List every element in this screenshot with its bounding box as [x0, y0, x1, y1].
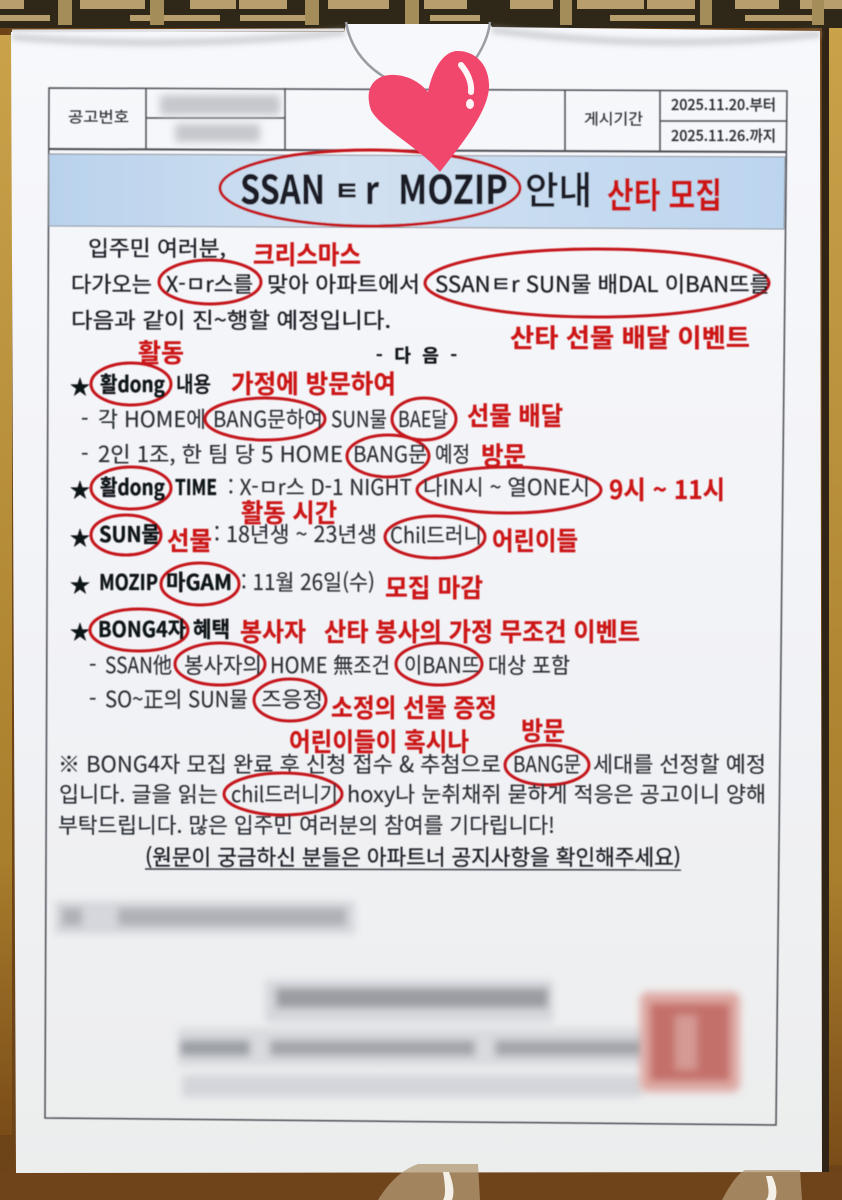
annotation: Christmas: 크리스마스 [253, 235, 361, 272]
header label: posting period: 게시기간 [584, 108, 643, 129]
detail line: teams of two: 2인 1조, 한 팀 당 5 HOME [98, 438, 343, 469]
section: activity time: 나IN시 ~ 열ONE시 [423, 471, 590, 502]
posting dates: 2025.11.20.부터 [671, 94, 776, 115]
footnote paragraph: chil드러니기 [231, 778, 338, 809]
section: recruitment deadline: : 11월 26일(수) [241, 566, 375, 597]
document frame and header table [45, 88, 787, 1125]
header label: notice number: 공고번호 [68, 106, 129, 127]
detail line: unconditional inclusion: HOME 無조건 [270, 649, 390, 680]
section: recruitment deadline: ★ [70, 569, 90, 598]
detail line: teams of two: - [81, 438, 88, 469]
annotation: activity time: 활동 시간 [241, 493, 337, 530]
heart sticker [369, 51, 489, 172]
detail line: visit each home: 각 HOME에 [98, 403, 206, 434]
detail line: small gift [89, 679, 497, 725]
footnote paragraph: hoxy나 눈취채쥐 묻하게 적응은 공고이니 양해 [347, 778, 766, 809]
section: activity details [70, 363, 396, 405]
detail line: teams of two: 방문 [481, 436, 526, 473]
footnote paragraph: 세대를 선정할 예정 [593, 748, 766, 779]
title: SSAN MOZIP notice [220, 150, 722, 226]
title: SSAN MOZIP notice: ㅌ [334, 170, 360, 209]
section: activity time: 활dong [100, 471, 165, 502]
section divider: below: - 다 음 - [376, 342, 457, 368]
section: gift eligibility: : 18년생 ~ 23년생 [214, 518, 377, 549]
detail line: visit each home: 선물 배달 [467, 396, 563, 433]
intro line 2: SSANㅌr SUN물 배DAL 이BAN뜨를 [435, 268, 770, 299]
section: volunteer benefits: 봉사자 [240, 612, 306, 649]
section: activity details: 가정에 방문하여 [231, 364, 396, 401]
section: recruitment deadline: 마GAM [166, 566, 232, 597]
detail line: small gift: - [89, 683, 96, 714]
intro line 2 [71, 249, 770, 317]
section: volunteer benefits: ★ [70, 616, 90, 645]
intro line 2: 다가오는 [71, 268, 152, 299]
footnote paragraph [58, 745, 766, 840]
blurred notice number [160, 95, 280, 142]
section: activity details: 활dong [100, 368, 165, 399]
section: gift eligibility: 선물 [167, 521, 212, 558]
detail line: teams of two: 예정 [435, 438, 470, 469]
clear plastic clips [378, 1164, 802, 1200]
intro line 2: 맞아 아파트에서 [267, 268, 420, 299]
detail line: unconditional inclusion: 이BAN뜨 [404, 649, 480, 680]
detail line: unconditional inclusion [89, 643, 570, 685]
intro line 2: X-ㅁr스를 [166, 268, 253, 299]
title band [49, 154, 785, 229]
title: SSAN MOZIP notice: 산타 모집 [607, 168, 722, 219]
title: SSAN MOZIP notice: 안내 [525, 160, 592, 215]
posting dates [671, 94, 776, 146]
section: activity time: : X-ㅁr스 D-1 NIGHT [228, 471, 412, 502]
detail line: unconditional inclusion: 봉사자의 [184, 649, 262, 680]
section: activity time: ★ [70, 474, 90, 503]
footnote paragraph: 입니다. 글을 읽는 [59, 778, 218, 809]
section: recruitment deadline: MOZIP [99, 566, 158, 597]
section: volunteer benefits [70, 609, 640, 651]
section: activity time [70, 467, 725, 513]
section: activity details: 내용 [176, 368, 211, 399]
footnote paragraph: 부탁드립니다. 많은 입주민 여러분의 참여를 기다립니다! [58, 809, 555, 840]
detail line: teams of two [81, 435, 526, 477]
detail line: unconditional inclusion: SSAN他 [105, 649, 172, 680]
section: gift eligibility: ★ [70, 522, 90, 551]
detail line: unconditional inclusion: 대상 포함 [488, 649, 570, 680]
posting dates: 2025.11.26.까지 [671, 125, 776, 146]
title: SSAN MOZIP notice: MOZIP [398, 158, 508, 216]
detail line: small gift: SO~正의 SUN물 [105, 683, 248, 714]
detail line: visit each home: SUN물 [331, 403, 387, 434]
annotation: visit: 방문 [521, 711, 565, 748]
section: gift eligibility: Chil드러니 [390, 519, 482, 550]
title: SSAN MOZIP notice: r [365, 160, 379, 215]
section: gift eligibility: 어린이들 [492, 521, 578, 558]
section: gift eligibility [70, 515, 578, 558]
footnote paragraph: BANG문 [513, 748, 581, 779]
detail line: visit each home: - [81, 403, 88, 434]
greeting line: 입주민 여러분, [88, 232, 226, 263]
detail line: small gift: 소정의 선물 증정 [331, 688, 497, 725]
detail line: visit each home [81, 396, 563, 440]
detail line: visit each home: BANG문하여 [213, 403, 323, 434]
annotation: Santa gift delivery event: 산타 선물 배달 이벤트 [510, 318, 750, 355]
intro line 3: 다음과 같이 진~행할 예정입니다. [71, 304, 391, 335]
blurred footer text [55, 901, 653, 1097]
detail line: small gift: 즈응정 [261, 683, 323, 714]
footnote paragraph: ※ BONG4자 모집 완료 후 신청 접수 & 추첨으로 [58, 748, 501, 779]
section: volunteer benefits: 산타 봉사의 가정 무조건 이벤트 [324, 612, 640, 649]
section: activity time: TIME [175, 471, 217, 502]
annotation: activity: 활동 [138, 333, 184, 370]
detail line: visit each home: BAE달 [398, 403, 448, 434]
detail line: teams of two: BANG문 [353, 438, 427, 469]
section: recruitment deadline: 모집 마감 [385, 568, 483, 605]
detail line: unconditional inclusion: - [89, 649, 96, 680]
title: SSAN MOZIP notice: SSAN [240, 158, 325, 216]
blurred red stamp [640, 992, 740, 1092]
section: recruitment deadline [70, 563, 483, 605]
section: activity time: 9시 ~ 11시 [609, 470, 725, 507]
section: volunteer benefits: 혜택 [193, 613, 230, 644]
annotation: in case the children: 어린이들이 혹시나 [289, 722, 469, 759]
section: gift eligibility: SUN물 [99, 518, 160, 549]
section: activity details: ★ [70, 371, 90, 400]
source note, underlined: (원문이 궁금하신 분들은 아파트너 공지사항을 확인해주세요) [145, 841, 681, 872]
section: volunteer benefits: BONG4자 [98, 613, 186, 644]
